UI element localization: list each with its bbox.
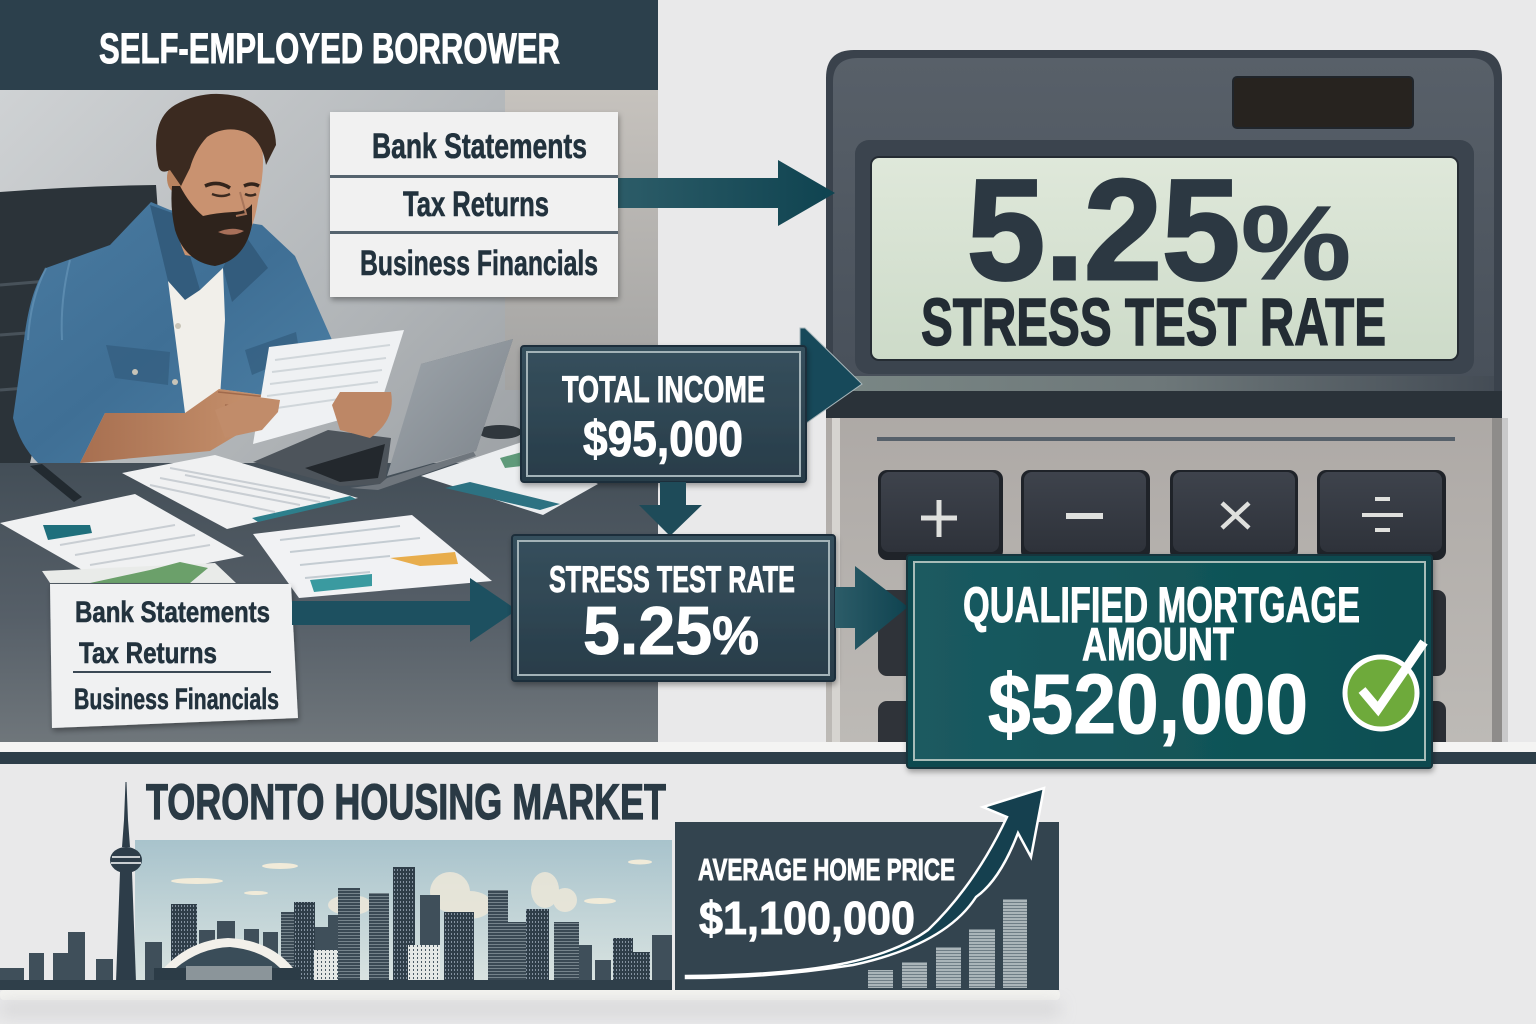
value: 5.25%: 5.25% [583, 593, 759, 669]
borrower figure [13, 94, 332, 463]
panel: top header bar [0, 0, 658, 90]
office chair [0, 185, 160, 463]
bar chart: rising prices [868, 899, 1027, 988]
calculator keys [878, 470, 1446, 761]
text: tax returns: Tax Returns [79, 637, 217, 670]
pen on desk [30, 464, 82, 502]
arrow: total income to calculator [800, 328, 862, 424]
display bezel [855, 140, 1474, 374]
value: $520,000: $520,000 [988, 657, 1308, 751]
mouse on desk [478, 425, 522, 439]
arrow: total income to stress test rate [639, 482, 702, 536]
paper held by borrower [215, 330, 404, 444]
text: business financials: Business Financials [360, 244, 598, 283]
dome stadium [154, 938, 300, 982]
panel: stress test rate [512, 535, 835, 681]
desk [0, 463, 658, 742]
label: total income: TOTAL INCOME [562, 369, 765, 410]
panel: toronto housing market [0, 774, 1060, 1016]
text: bank statements: Bank Statements [75, 596, 270, 629]
label: average home price: AVERAGE HOME PRICE [698, 852, 955, 887]
value: $95,000: $95,000 [583, 411, 743, 467]
desk documents [0, 442, 598, 598]
panel: calculator [826, 50, 1508, 761]
text: tax returns: Tax Returns [403, 185, 549, 224]
skyline illustration [0, 782, 672, 990]
panel: divider strip [0, 742, 1536, 764]
panel: qualified mortgage amount [907, 555, 1432, 768]
label: amount: AMOUNT [1082, 618, 1234, 670]
value: $1,100,000: $1,100,000 [699, 892, 915, 944]
solar panel [1233, 77, 1413, 128]
label: stress test rate: STRESS TEST RATE [549, 559, 795, 600]
text: bank statements: Bank Statements [372, 127, 587, 166]
panel: total income [521, 346, 806, 482]
display screen [871, 157, 1458, 360]
cn tower [110, 782, 142, 982]
arrow: stress test rate to qualified mortgage [835, 566, 908, 650]
arrow: documents to stress test rate [292, 578, 517, 642]
label: qualified mortgage: QUALIFIED MORTGAGE [963, 577, 1360, 633]
panel: loose document list [50, 584, 298, 728]
panel: average home price [675, 788, 1059, 990]
heading: toronto housing market: TORONTO HOUSING MARKET [146, 774, 666, 830]
arrow: documents to calculator display [618, 160, 835, 226]
display value 5.25%: 5.25 [967, 151, 1240, 310]
panel: document checklist card [330, 112, 618, 297]
heading: self-employed borrower: SELF-EMPLOYED BORROWER [99, 25, 560, 73]
icon: green check mark [1345, 642, 1424, 729]
text: business financials: Business Financials [74, 683, 279, 716]
display value 5.25%: % [1241, 185, 1351, 302]
arrow: rising price trend [686, 788, 1044, 978]
laptop [253, 339, 513, 490]
panel: self-employed borrower photo scene [0, 90, 658, 742]
